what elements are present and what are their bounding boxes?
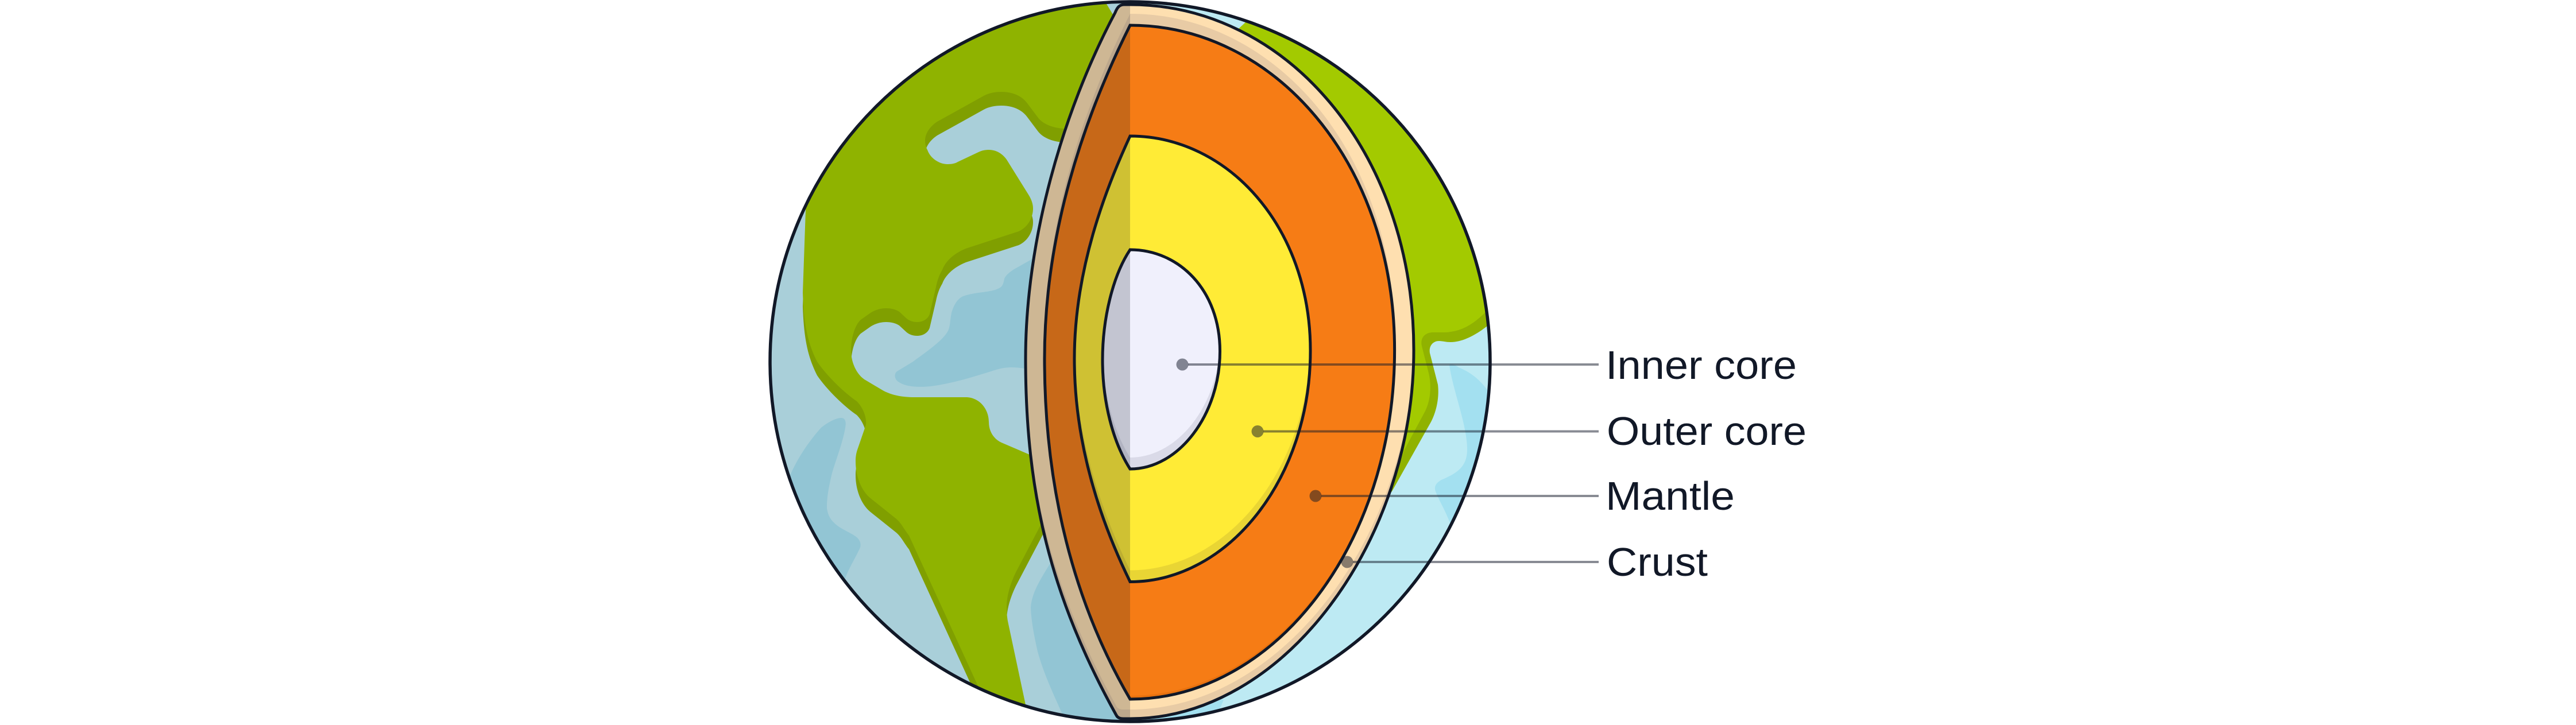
callout: inner core: Inner core	[1606, 343, 1797, 387]
deep water: right bottom patch	[1144, 699, 1224, 720]
layer: inner core	[1101, 248, 1221, 471]
deep water: right patch	[1435, 364, 1487, 523]
callout: crust	[1341, 540, 1708, 584]
callout: mantle	[1309, 474, 1735, 518]
layer: crust	[1024, 3, 1415, 720]
land: right continent	[1239, 22, 1485, 458]
callout: inner core	[1176, 343, 1797, 387]
layer: outer core	[1073, 134, 1312, 583]
callout: crust: Crust	[1607, 540, 1708, 584]
deep water: upper sea patch	[895, 259, 1032, 387]
deep water: bottom patch	[1031, 564, 1120, 720]
land: left continent	[803, 4, 1113, 704]
land shadow: left continent	[803, 92, 1064, 687]
callout: outer core: Outer core	[1607, 409, 1807, 453]
globe outline	[770, 2, 1490, 722]
callout: mantle: Mantle	[1606, 474, 1735, 518]
land shadow: right continent	[1239, 22, 1487, 493]
callout: outer core	[1252, 409, 1807, 453]
ocean: left hemisphere	[772, 3, 1122, 714]
ocean: right hemisphere	[1143, 3, 1488, 708]
layer: mantle	[1043, 24, 1397, 700]
left hemisphere land and deep water	[790, 4, 1120, 720]
globe: Earth surface	[768, 0, 1492, 723]
deep water: lower-left patch	[790, 418, 860, 579]
